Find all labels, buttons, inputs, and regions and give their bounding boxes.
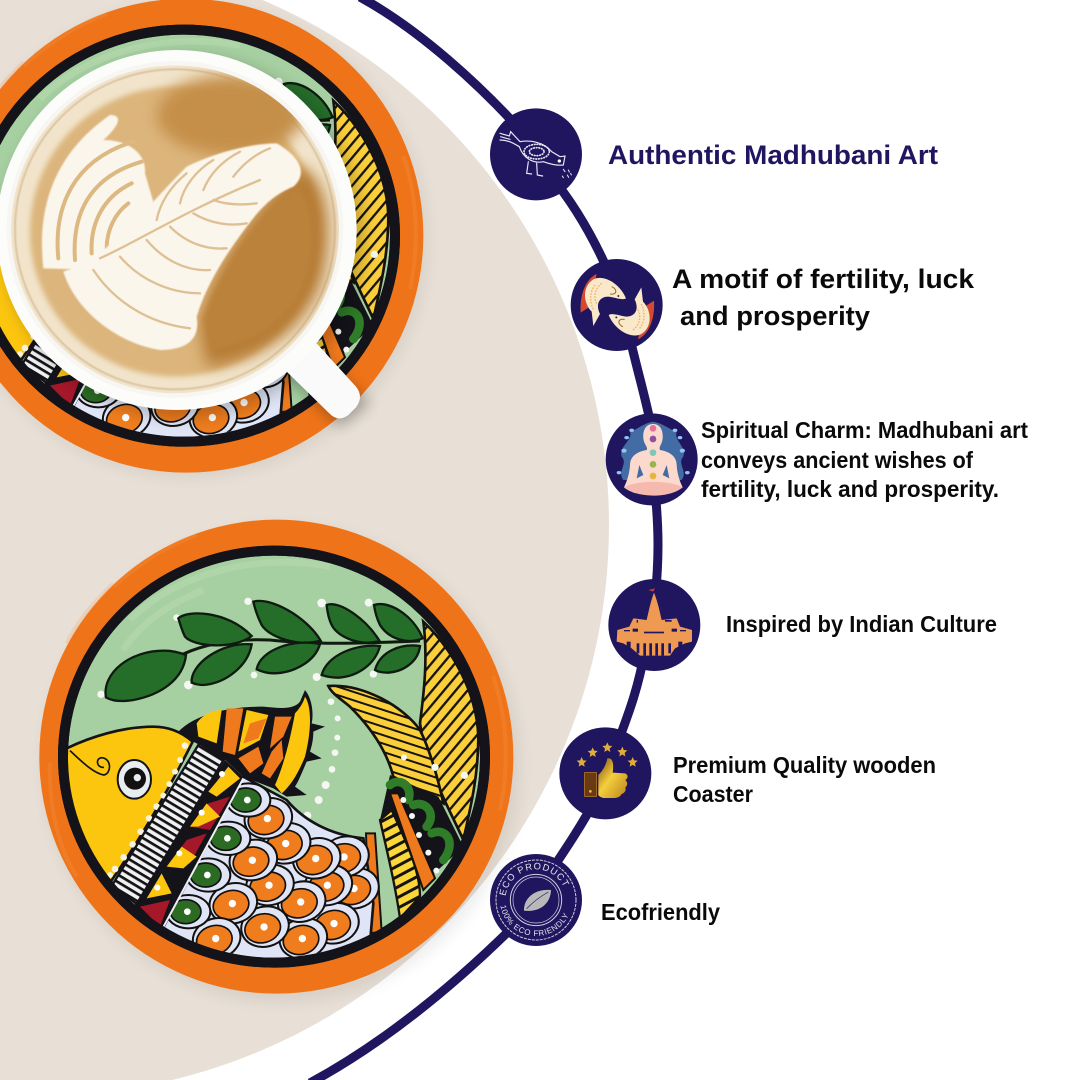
icon 5: thumbs up with stars [559, 727, 651, 819]
text: ecofriendly: Ecofriendly [601, 899, 720, 925]
icon 6: eco product stamp: ECO PRODUCT [499, 862, 570, 896]
text: motif of fertility [672, 264, 975, 331]
icon 3: meditation chakras [606, 413, 698, 505]
icon 2: pisces fish [571, 259, 663, 351]
navy timeline arc [310, 0, 658, 1080]
bottom coaster: Madhubani fish [39, 520, 520, 1002]
icon 4: temple [608, 579, 700, 671]
latte art rosetta [42, 115, 157, 270]
latte surface [11, 65, 339, 393]
top coaster with coffee cup [0, 0, 427, 477]
text: spiritual charm: fertility, luck and prosperity. [701, 476, 999, 502]
icon 6: eco product stamp [490, 854, 582, 946]
text: spiritual charm: conveys ancient wishes of [701, 447, 973, 473]
text: spiritual charm: Spiritual Charm: Madhubani art [701, 417, 1028, 443]
latte art feather [63, 143, 301, 350]
beige background semicircle [0, 0, 609, 1080]
text: motif of fertility: A motif of fertility, luck [672, 264, 975, 294]
text: Authentic Madhubani Art: Authentic Madhubani Art [608, 140, 938, 170]
icon 6: eco product stamp: 100% ECO FRIENDLY [500, 905, 568, 936]
icon 1: peacock [490, 108, 582, 200]
cup handle [287, 343, 360, 418]
text: motif of fertility: and prosperity [680, 301, 870, 331]
text: premium quality: Coaster [673, 781, 753, 807]
text: inspired by Indian culture: Inspired by Indian Culture [726, 611, 997, 637]
text: spiritual charm [701, 417, 1028, 502]
text: premium quality [673, 752, 936, 807]
coffee cup [0, 50, 370, 427]
text: premium quality: Premium Quality wooden [673, 752, 936, 778]
